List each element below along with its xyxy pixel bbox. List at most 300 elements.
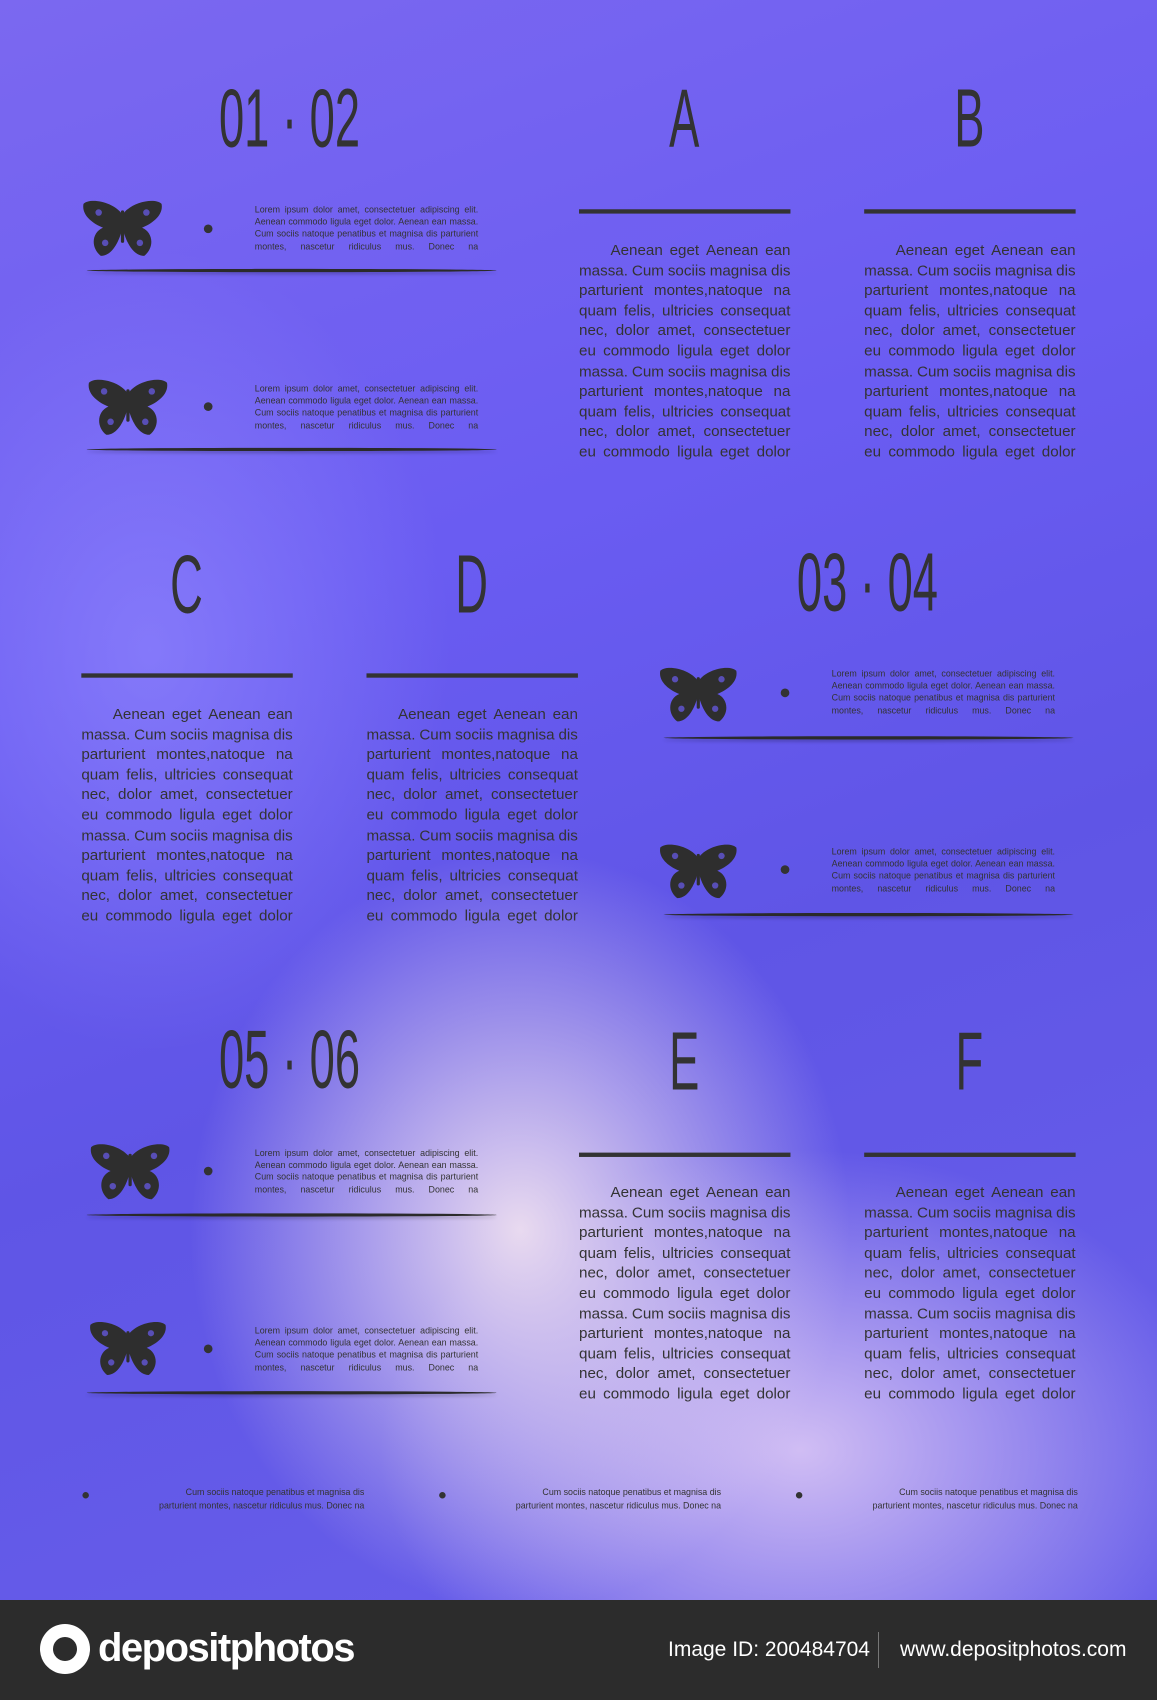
text block A: dolor [616,321,649,339]
text block E: sociis [668,1304,706,1321]
bar D [366,673,578,678]
text block F: Aenean [896,1183,948,1200]
text block C: consectetuer [206,785,293,803]
text block E: consectetuer [703,1364,790,1382]
text block F: dolor [901,1364,935,1382]
text block B: ean [1050,241,1076,258]
text block D: ligula [465,906,500,924]
bottom note 3: Cum sociis natoque penatibus et magnisa dis [899,1488,1078,1497]
text block A: sociis [668,261,706,278]
text block E: magnisa [710,1203,767,1220]
text block D: eget [507,906,537,924]
text block F: ligula [962,1284,998,1301]
text block B: nec, [864,422,893,440]
row 02 [86,380,496,455]
text block B [864,241,1076,460]
small text: Lorem ipsum dolor amet, consectetuer adipiscing elit. Aenean commodo ligula eget dolor. Aenean ean massa. Cum sociis natoque penatibus et magnisa dis parturient montes, nascetur ridiculus mus. Donec na [255,384,478,430]
text block C: dis [273,826,293,843]
text block D: parturient [366,846,431,863]
bar B [864,209,1076,214]
text block F: na [1059,1223,1076,1241]
text block E: nec, [579,1364,608,1382]
text block E: consequat [720,1344,790,1362]
icon: butterfly [90,1322,166,1375]
text block C: commodo [105,806,172,823]
text block D: quam [366,866,404,883]
text block D: sociis [455,725,493,742]
text block F: felis, [909,1344,940,1362]
text block E: felis, [624,1344,655,1362]
row 06 [86,1322,496,1398]
text block B: dolor [901,422,935,440]
text block D: magnisa [497,725,555,742]
text block F: montes,natoque [939,1324,1048,1341]
text block A: quam [579,402,617,419]
text block A: amet, [658,422,695,440]
text block B: massa. [864,261,913,278]
text block F: sociis [953,1304,991,1321]
bar A [579,209,790,214]
text block D: commodo [391,806,457,823]
text block B: felis, [909,402,940,419]
footer image id: Image ID: 200484704 [668,1638,870,1661]
text block C: montes,natoque [156,846,265,863]
text block D: quam [366,765,404,783]
text block E: eu [579,1284,596,1301]
text block B: nec, [864,321,893,339]
text block A: ean [765,241,790,258]
text block E [579,1183,790,1402]
text block F: parturient [864,1223,928,1241]
bottom note 1: Cum sociis natoque penatibus et magnisa dis [186,1488,364,1497]
text block E: dolor [616,1264,649,1281]
text block C: consectetuer [206,886,293,904]
text block F: consequat [1006,1344,1076,1362]
text block C: quam [81,866,119,883]
text block C: felis, [126,765,157,783]
text block E: amet, [658,1364,695,1382]
text block A: Aenean [706,241,758,258]
text block C: consequat [223,866,293,883]
text block C: ean [267,705,293,722]
text block A: eget [720,442,749,460]
text block D: montes,natoque [441,846,550,863]
text block E: magnisa [710,1304,767,1321]
text block B: consectetuer [989,422,1076,440]
text block C: ultricies [164,866,216,883]
text block E: consequat [720,1243,790,1261]
text block D: massa. [366,826,415,843]
text block F: quam [864,1344,902,1362]
text block F: felis, [909,1243,940,1261]
text block F: quam [864,1243,902,1261]
bottom note 1: parturient montes, nascetur ridiculus mus. Donec na [159,1500,364,1510]
text block F: sociis [953,1203,991,1220]
text block D: felis, [411,866,443,883]
text block D: Cum [419,826,451,843]
text block B: Aenean [896,241,948,258]
bottom note 1 [82,1488,364,1510]
text block A: nec, [579,321,608,339]
text block C: amet, [160,886,198,904]
footer bar [0,1600,1157,1700]
text block E: ligula [677,1284,713,1301]
text block C: eget [222,806,252,823]
text block C: ligula [179,806,215,823]
text block C: Cum [134,826,166,843]
text block B: Cum [917,261,949,278]
text block C: parturient [81,745,145,762]
text block C: dolor [259,906,293,924]
text block C: magnisa [212,725,269,742]
text block A: amet, [658,321,695,339]
text block C: sociis [170,725,208,742]
text block B: eu [864,442,881,460]
text block C: magnisa [212,826,269,843]
footer logo: depositphotos [98,1626,354,1670]
row 05 [86,1144,496,1220]
text block E: ligula [677,1385,713,1402]
text block F: consectetuer [989,1264,1076,1281]
text block C: amet, [160,785,198,803]
text block D: na [561,846,578,863]
text block A: dis [771,362,790,379]
text block E: eget [670,1183,699,1200]
text block F: eget [955,1183,984,1200]
text block D: na [561,745,578,762]
bottom note 2: parturient montes, nascetur ridiculus mus. Donec na [516,1500,721,1510]
text block B: na [1059,382,1076,399]
text block C: Cum [134,725,166,742]
text block C: Aenean [208,705,261,722]
text block F: commodo [888,1284,955,1301]
text block C: nec, [81,886,110,904]
bottom note 3 [796,1488,1078,1510]
text block C: commodo [105,906,172,924]
text block B: ultricies [947,301,999,319]
text block B: eu [864,342,881,359]
text block D: Aenean [398,705,450,722]
text block D [366,705,578,924]
text block B: ultricies [947,402,999,419]
text block D: ean [553,705,578,722]
text block E: na [774,1324,790,1341]
title: C: C [170,539,203,631]
text block C: eu [81,806,98,823]
bar F [864,1153,1076,1157]
text block D: ultricies [449,866,501,883]
title: 05 · 06: 05 · 06 [219,1014,360,1106]
small text: Lorem ipsum dolor amet, consectetuer adipiscing elit. Aenean commodo ligula eget dolor. Aenean ean massa. Cum sociis natoque penatibus et magnisa dis parturient montes, nascetur ridiculus mus. Donec na [832,847,1055,893]
text block F: montes,natoque [939,1223,1048,1241]
text block D: amet, [445,785,483,803]
text block B: dolor [1042,342,1076,359]
bar E [579,1153,790,1157]
title: F: F [956,1016,983,1108]
icon: butterfly [660,844,737,898]
text block A: commodo [603,342,670,359]
text block F: dis [1056,1203,1076,1220]
footer website: www.depositphotos.com [900,1638,1126,1661]
text block B: consectetuer [989,321,1076,339]
text block A: dolor [757,442,790,460]
text block E: ean [765,1183,790,1200]
text block D: dolor [403,785,437,803]
text block B: felis, [909,301,940,319]
text block D: amet, [445,886,483,904]
text block A: ultricies [662,402,713,419]
text block A: magnisa [710,362,767,379]
text block F: nec, [864,1364,893,1382]
text block E: montes,natoque [654,1223,763,1241]
icon: butterfly [83,200,162,256]
text block C: montes,natoque [156,745,265,762]
text block A: felis, [624,402,655,419]
title: B: B [954,73,984,165]
text block F: eget [1005,1385,1035,1402]
small text: Lorem ipsum dolor amet, consectetuer adipiscing elit. Aenean commodo ligula eget dolor. Aenean ean massa. Cum sociis natoque penatibus et magnisa dis parturient montes, nascetur ridiculus mus. Donec na [255,1148,478,1194]
text block A: massa. [579,261,628,278]
text block D: nec, [366,886,395,904]
text block E: commodo [603,1385,670,1402]
text block E: amet, [658,1264,695,1281]
text block F: dolor [1042,1284,1076,1301]
text block E: Cum [632,1304,664,1321]
text block F: parturient [864,1324,928,1341]
text block A [579,241,790,460]
text block E: Cum [632,1203,664,1220]
text block D: eu [366,906,383,924]
text block D: nec, [366,785,395,803]
text block C: parturient [81,846,145,863]
text block A: parturient [579,382,643,399]
text block E: massa. [579,1304,628,1321]
text block A: montes,natoque [654,281,763,298]
text block E: quam [579,1243,617,1261]
text block F: nec, [864,1264,893,1281]
small text: Lorem ipsum dolor amet, consectetuer adipiscing elit. Aenean commodo ligula eget dolor. Aenean ean massa. Cum sociis natoque penatibus et magnisa dis parturient montes, nascetur ridiculus mus. Donec na [255,205,478,251]
text block B: quam [864,402,902,419]
text block A: nec, [579,422,608,440]
text block F: commodo [888,1385,955,1402]
text block E: dis [771,1304,790,1321]
text block E: ultricies [662,1344,713,1362]
text block A: eget [670,241,699,258]
row 01 [83,200,496,276]
text block D: consectetuer [491,785,578,803]
text block E: Aenean [706,1183,758,1200]
text block A: Cum [632,362,664,379]
text block C: massa. [81,725,130,742]
text block A: magnisa [710,261,767,278]
text block E: commodo [603,1284,670,1301]
text block E: nec, [579,1264,608,1281]
text block E: dolor [616,1364,649,1382]
text block C: felis, [126,866,157,883]
text block D: dolor [544,906,578,924]
icon: butterfly [90,1144,170,1200]
text block C: Aenean [113,705,165,722]
text block D: massa. [366,725,415,742]
text block D: montes,natoque [441,745,550,762]
text block C: dolor [259,806,293,823]
text block D: felis, [411,765,443,783]
row 03 [660,668,1074,744]
text block A: consequat [720,301,790,319]
text block C: quam [81,765,119,783]
bottom note 2: Cum sociis natoque penatibus et magnisa dis [542,1488,721,1497]
text block C: eget [172,705,201,722]
text block F: dolor [901,1264,935,1281]
text block A: ligula [677,342,713,359]
small text: Lorem ipsum dolor amet, consectetuer adipiscing elit. Aenean commodo ligula eget dolor. Aenean ean massa. Cum sociis natoque penatibus et magnisa dis parturient montes, nascetur ridiculus mus. Donec na [255,1326,478,1372]
text block F [864,1183,1076,1402]
text block E: eget [720,1284,749,1301]
text block B: magnisa [995,362,1052,379]
text block C: eget [222,906,252,924]
text block E: dolor [757,1284,790,1301]
text block C: consequat [223,765,293,783]
text block D: consectetuer [491,886,578,904]
text block D: parturient [366,745,431,762]
title: A: A [669,73,699,165]
text block A: montes,natoque [654,382,763,399]
text block B: dolor [901,321,935,339]
text block A: Aenean [610,241,663,258]
text block B: amet, [943,321,981,339]
text block B: sociis [953,362,991,379]
text block D: eget [457,705,487,722]
text block C: na [276,745,293,762]
icon: butterfly [88,380,168,435]
text block C: ultricies [164,765,216,783]
text block F: massa. [864,1203,913,1220]
text block B: quam [864,301,902,319]
bottom note 3: parturient montes, nascetur ridiculus mus. Donec na [873,1500,1078,1510]
text block B: consequat [1006,301,1076,319]
text block E: felis, [624,1243,655,1261]
text block C: dolor [118,886,152,904]
text block F: amet, [943,1364,981,1382]
text block E: eu [579,1385,596,1402]
text block A: consectetuer [703,422,790,440]
text block E: Aenean [610,1183,663,1200]
text block A: quam [579,301,617,319]
text block B: dis [1056,362,1076,379]
text block E: na [774,1223,790,1241]
text block B: sociis [953,261,991,278]
text block D: Aenean [493,705,546,722]
text block F: consequat [1006,1243,1076,1261]
text block B: eget [955,241,984,258]
text block A: ligula [677,442,713,460]
text block C: ligula [179,906,215,924]
title: 01 · 02: 01 · 02 [219,73,360,165]
text block F: dolor [1042,1385,1076,1402]
text block D: sociis [455,826,493,843]
text block A: eu [579,442,596,460]
text block E: massa. [579,1203,628,1220]
text block A: consequat [720,402,790,419]
text block B: na [1059,281,1076,298]
text block C: massa. [81,826,130,843]
small text: Lorem ipsum dolor amet, consectetuer adipiscing elit. Aenean commodo ligula eget dolor. Aenean ean massa. Cum sociis natoque penatibus et magnisa dis parturient montes, nascetur ridiculus mus. Donec na [832,669,1055,715]
text block C: dolor [118,785,152,803]
text block B: eget [1005,442,1035,460]
text block F: ultricies [947,1344,999,1362]
text block B: commodo [888,442,955,460]
text block D: consequat [508,866,578,883]
text block B: massa. [864,362,913,379]
text block A: massa. [579,362,628,379]
text block B: Cum [917,362,949,379]
text block D: magnisa [497,826,555,843]
text block C: nec, [81,785,110,803]
row 04 [660,844,1074,920]
text block F: ligula [962,1385,998,1402]
text block A: consectetuer [703,321,790,339]
text block C: dis [273,725,293,742]
text block E: dis [771,1203,790,1220]
text block C: na [276,846,293,863]
text block A: na [774,281,790,298]
bar C [81,673,293,678]
bottom note 2 [439,1488,722,1510]
text block F: eu [864,1385,881,1402]
text block F: amet, [943,1264,981,1281]
text block D: dis [558,725,578,742]
text block E: montes,natoque [654,1324,763,1341]
text block D: ultricies [449,765,501,783]
text block B: Aenean [991,241,1043,258]
text block C [81,705,293,924]
text block C: sociis [170,826,208,843]
text block F: eget [1005,1284,1035,1301]
text block F: magnisa [995,1203,1052,1220]
text block A: felis, [624,301,655,319]
text block E: consectetuer [703,1264,790,1281]
text block B: dis [1056,261,1076,278]
text block C: eu [81,906,98,924]
text block A: eu [579,342,596,359]
text block E: dolor [757,1385,790,1402]
title: D: D [455,539,488,631]
text block A: na [774,382,790,399]
icon: butterfly [660,668,737,722]
text block D: eget [507,806,537,823]
text block D: ligula [465,806,500,823]
text block F: Aenean [991,1183,1043,1200]
text block B: montes,natoque [939,281,1048,298]
text block E: parturient [579,1324,643,1341]
text block F: na [1059,1324,1076,1341]
text block A: Cum [632,261,664,278]
text block E: parturient [579,1223,643,1241]
text block F: Cum [917,1304,949,1321]
text block B: magnisa [995,261,1052,278]
title: E: E [669,1016,699,1108]
text block A: dolor [616,422,649,440]
text block B: parturient [864,281,928,298]
text block E: sociis [668,1203,706,1220]
text block A: dis [771,261,790,278]
text block A: eget [720,342,749,359]
text block D: consequat [508,765,578,783]
text block A: ultricies [662,301,713,319]
text block D: commodo [391,906,457,924]
text block D: dolor [544,806,578,823]
text block D: Cum [419,725,451,742]
